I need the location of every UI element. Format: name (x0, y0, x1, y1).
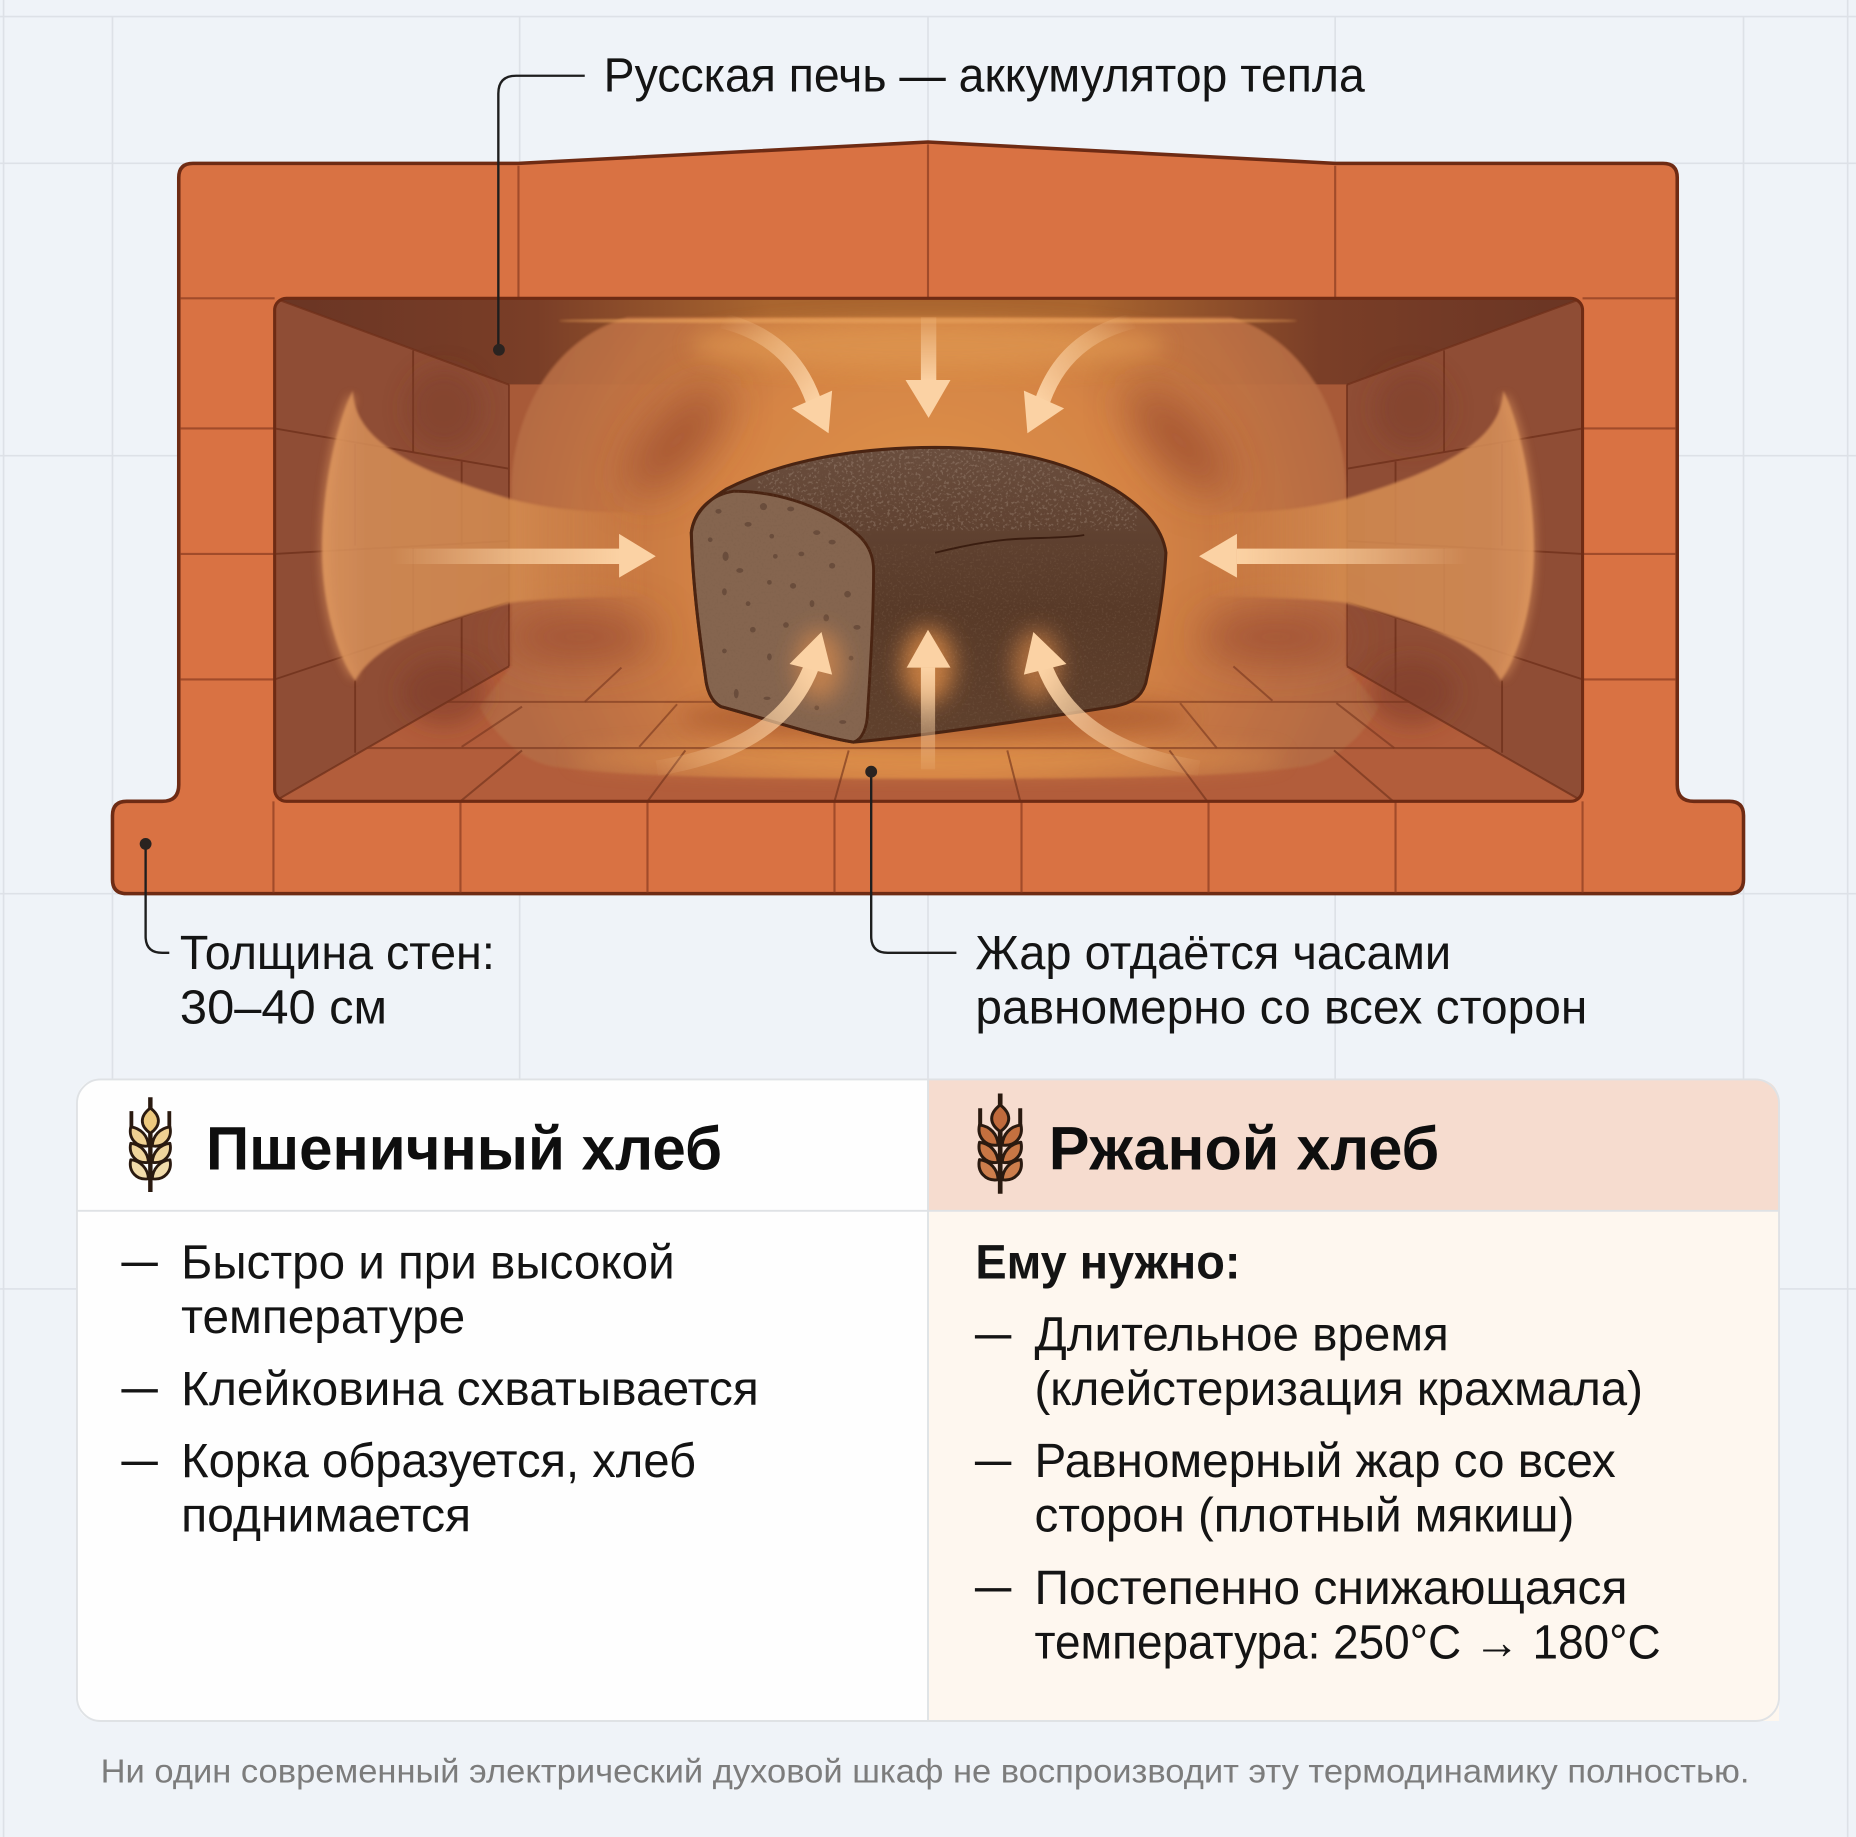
arrow: upper left (722, 321, 832, 433)
list: rye bread: Ему нужно: (975, 1236, 1240, 1289)
oven body (112, 142, 1744, 894)
right wall (1347, 298, 1583, 801)
callout label: even heat: равномерно со всех сторон (975, 981, 1587, 1034)
arrow: from right (1199, 534, 1468, 578)
chamber outline (275, 298, 1583, 801)
list: rye bread: — (975, 1440, 1011, 1480)
heat core glow (479, 317, 1379, 779)
arrow: lower right (1024, 632, 1199, 768)
heading: wheat bread: Пшеничный хлеб (206, 1114, 722, 1183)
panel: comparison table (77, 1079, 1779, 1721)
callout label: wall thickness: 30–40 см (180, 981, 387, 1034)
icon: rye ear (979, 1094, 1021, 1194)
list: rye bread: температура: 250°C → 180°C (1035, 1616, 1661, 1669)
list: rye bread: сторон (плотный мякиш) (1035, 1490, 1574, 1543)
list: rye bread: (клейстеризация крахмала) (1035, 1363, 1643, 1416)
list: rye bread: Постепенно снижающаяся (1035, 1562, 1628, 1615)
left wall (275, 298, 509, 801)
callout label: heat accumulator: Русская печь — аккумулятор тепла (604, 50, 1365, 103)
arrow: from bottom (907, 630, 950, 769)
arrow: from top (906, 317, 950, 418)
footnote: Ни один современный электрический духовой шкаф не воспроизводит эту термодинамику полностью. (101, 1753, 1749, 1791)
wall brick lines (275, 350, 1583, 753)
crust crack (935, 535, 1084, 553)
list: wheat bread: — (122, 1368, 158, 1408)
back wall (509, 385, 1347, 666)
top glow band (691, 322, 1165, 369)
bread shadow (681, 694, 1190, 741)
list: wheat bread (122, 1236, 759, 1543)
callout leader: wall thickness (140, 838, 169, 953)
callout label: wall thickness (180, 927, 495, 1034)
callout leader: heat accumulator (493, 76, 585, 356)
heat horn: right (1211, 391, 1534, 681)
list: rye bread: Длительное время (1035, 1309, 1449, 1362)
list: rye bread: — (975, 1314, 1011, 1354)
bread cut face (691, 491, 874, 742)
list: wheat bread: температуре (181, 1291, 465, 1344)
panel: wheat column (77, 1079, 928, 1721)
panel: rye column (928, 1079, 1779, 1721)
callout label: even heat (975, 927, 1587, 1034)
icon: wheat ear (130, 1097, 170, 1192)
list: rye bread: Равномерный жар со всех (1035, 1435, 1616, 1488)
floor glow band (598, 749, 1258, 770)
floor tile lines (275, 298, 1583, 801)
heading: rye bread: Ржаной хлеб (1049, 1114, 1439, 1183)
list: wheat bread: Быстро и при высокой (181, 1236, 675, 1289)
list: wheat bread: поднимается (181, 1490, 471, 1543)
arrow: lower left (657, 632, 832, 768)
panel: oven illustration (112, 142, 1744, 894)
arrow: from left (391, 534, 656, 578)
callout label: wall thickness: Толщина стен: (180, 927, 495, 980)
list: wheat bread: — (122, 1440, 158, 1480)
list: wheat bread: — (122, 1242, 158, 1282)
arrow glows (795, 627, 1061, 703)
list: wheat bread: Клейковина схватывается (181, 1363, 759, 1416)
callout leader: even heat (865, 766, 956, 953)
list: rye bread (975, 1236, 1661, 1669)
bread loaf (691, 447, 1166, 746)
ceiling (275, 298, 1583, 385)
list: rye bread: — (975, 1567, 1011, 1607)
callout label: even heat: Жар отдаётся часами (975, 927, 1451, 980)
list: wheat bread: Корка образуется, хлеб (181, 1435, 696, 1488)
oven chamber (275, 298, 1583, 801)
heat horn: left (322, 391, 645, 681)
floor (275, 666, 1583, 801)
arrow: upper right (1024, 321, 1134, 433)
